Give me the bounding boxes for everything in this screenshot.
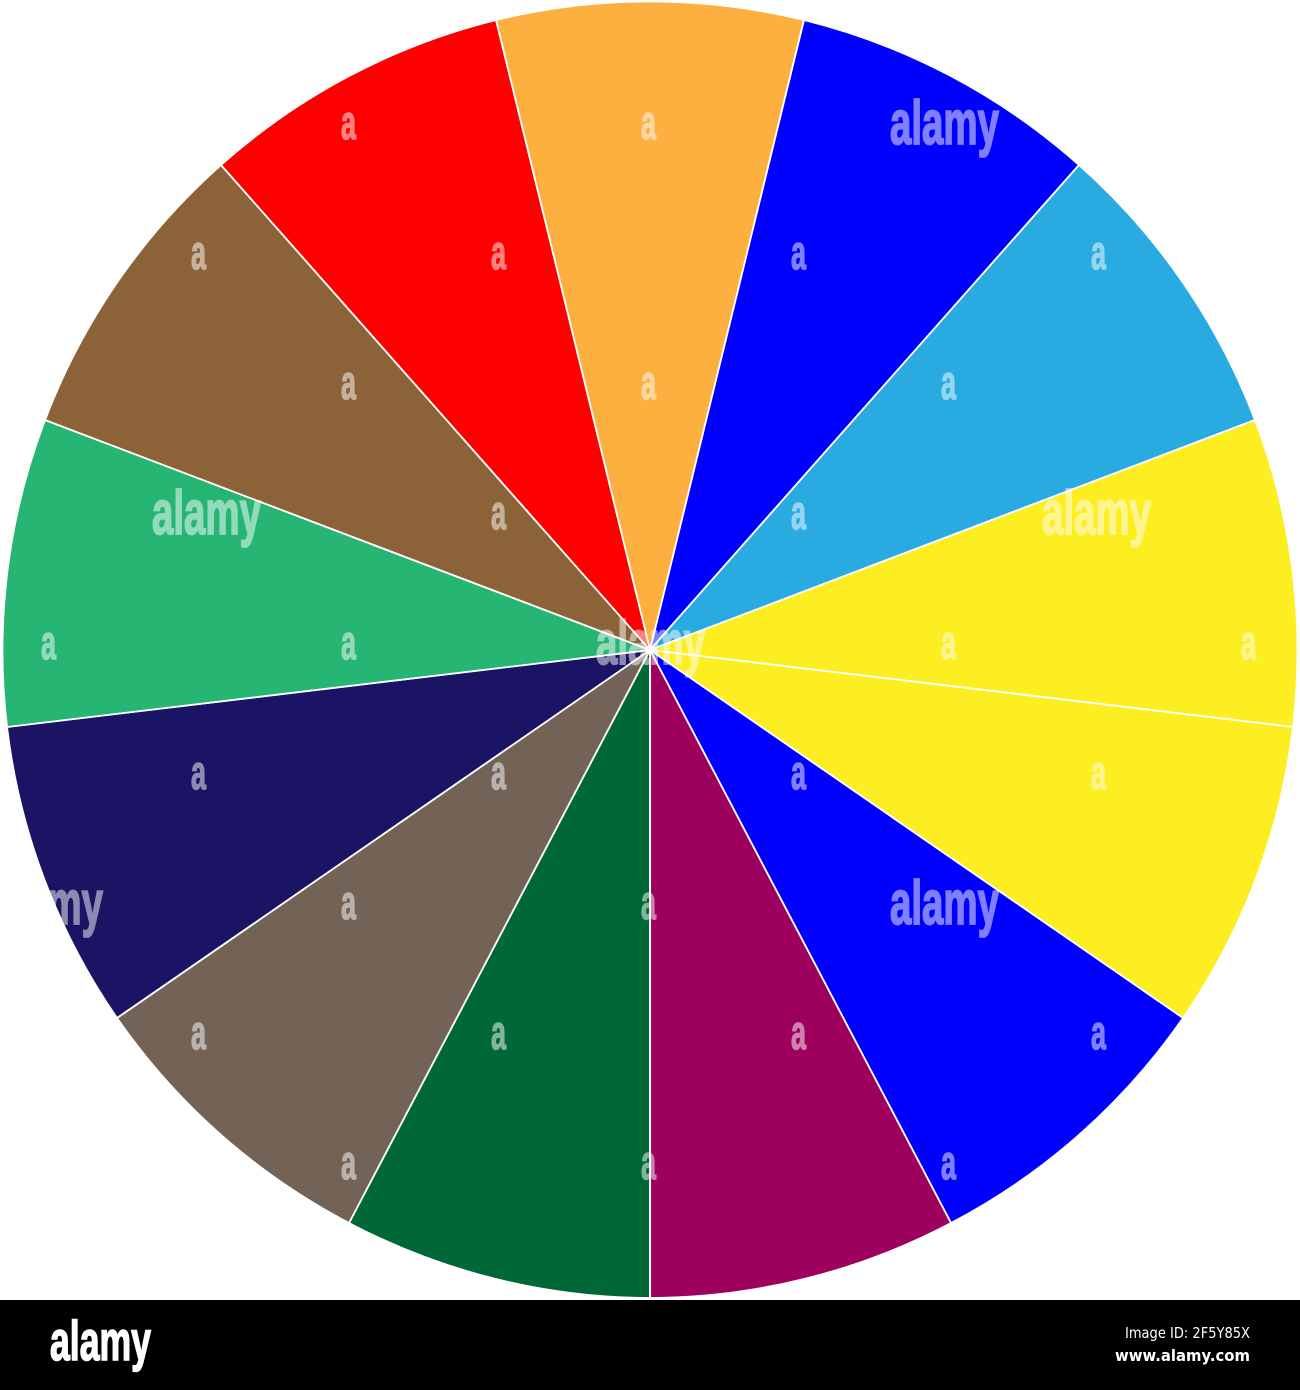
watermark overlay: a xyxy=(491,227,506,280)
watermark overlay: a xyxy=(791,747,806,800)
watermark overlay: a xyxy=(1091,747,1106,800)
wedge: taupe xyxy=(117,650,650,1223)
watermark overlay: a xyxy=(341,877,356,930)
wedge: green xyxy=(3,420,650,727)
watermark overlay: a xyxy=(1241,617,1256,670)
watermark overlay: a xyxy=(491,747,506,800)
watermark overlay: a xyxy=(341,97,356,150)
watermark overlay: alamy xyxy=(890,89,999,158)
wedge: blue (top right) xyxy=(650,20,1079,650)
watermark overlay: a xyxy=(791,1007,806,1060)
watermark overlay xyxy=(0,89,1256,1190)
footer band xyxy=(0,1300,1300,1390)
watermark overlay: alamy xyxy=(890,869,999,938)
wedge: magenta purple xyxy=(650,650,951,1298)
watermark overlay: a xyxy=(1091,227,1106,280)
wedge: light blue xyxy=(650,165,1255,650)
watermark overlay: a xyxy=(941,1137,956,1190)
watermark overlay: a xyxy=(41,617,56,670)
watermark overlay: a xyxy=(341,1137,356,1190)
watermark overlay: a xyxy=(191,227,206,280)
watermark overlay: a xyxy=(641,357,656,410)
watermark overlay: a xyxy=(491,1007,506,1060)
watermark overlay: alamy xyxy=(596,609,705,678)
wedge: dark green xyxy=(349,650,650,1298)
watermark overlay: a xyxy=(791,227,806,280)
watermark overlay: alamy xyxy=(152,479,261,548)
wedge: red xyxy=(221,20,650,650)
watermark overlay: a xyxy=(341,357,356,410)
wedge: navy xyxy=(7,650,650,1018)
image id: Image ID: 2F5Y85X xyxy=(1125,1324,1250,1342)
watermark overlay: a xyxy=(491,487,506,540)
wedge: yellow (upper) xyxy=(650,420,1297,727)
wedge: orange xyxy=(496,1,804,650)
watermark overlay: a xyxy=(191,747,206,800)
watermark overlay: alamy xyxy=(1042,479,1151,548)
watermark overlay: a xyxy=(641,1137,656,1190)
watermark overlay: a xyxy=(1091,1007,1106,1060)
watermark overlay: a xyxy=(191,1007,206,1060)
wedge: yellow (lower) xyxy=(650,650,1293,1018)
watermark overlay: a xyxy=(791,487,806,540)
watermark overlay: a xyxy=(641,877,656,930)
website: www.alamy.com xyxy=(1115,1346,1250,1365)
watermark overlay: a xyxy=(641,97,656,150)
footer logo: alamy xyxy=(50,1309,151,1372)
watermark overlay: a xyxy=(941,617,956,670)
watermark overlay: a xyxy=(941,357,956,410)
wedge: blue (lower right) xyxy=(650,650,1183,1223)
wedge: brown xyxy=(45,165,650,650)
watermark overlay: a xyxy=(341,617,356,670)
